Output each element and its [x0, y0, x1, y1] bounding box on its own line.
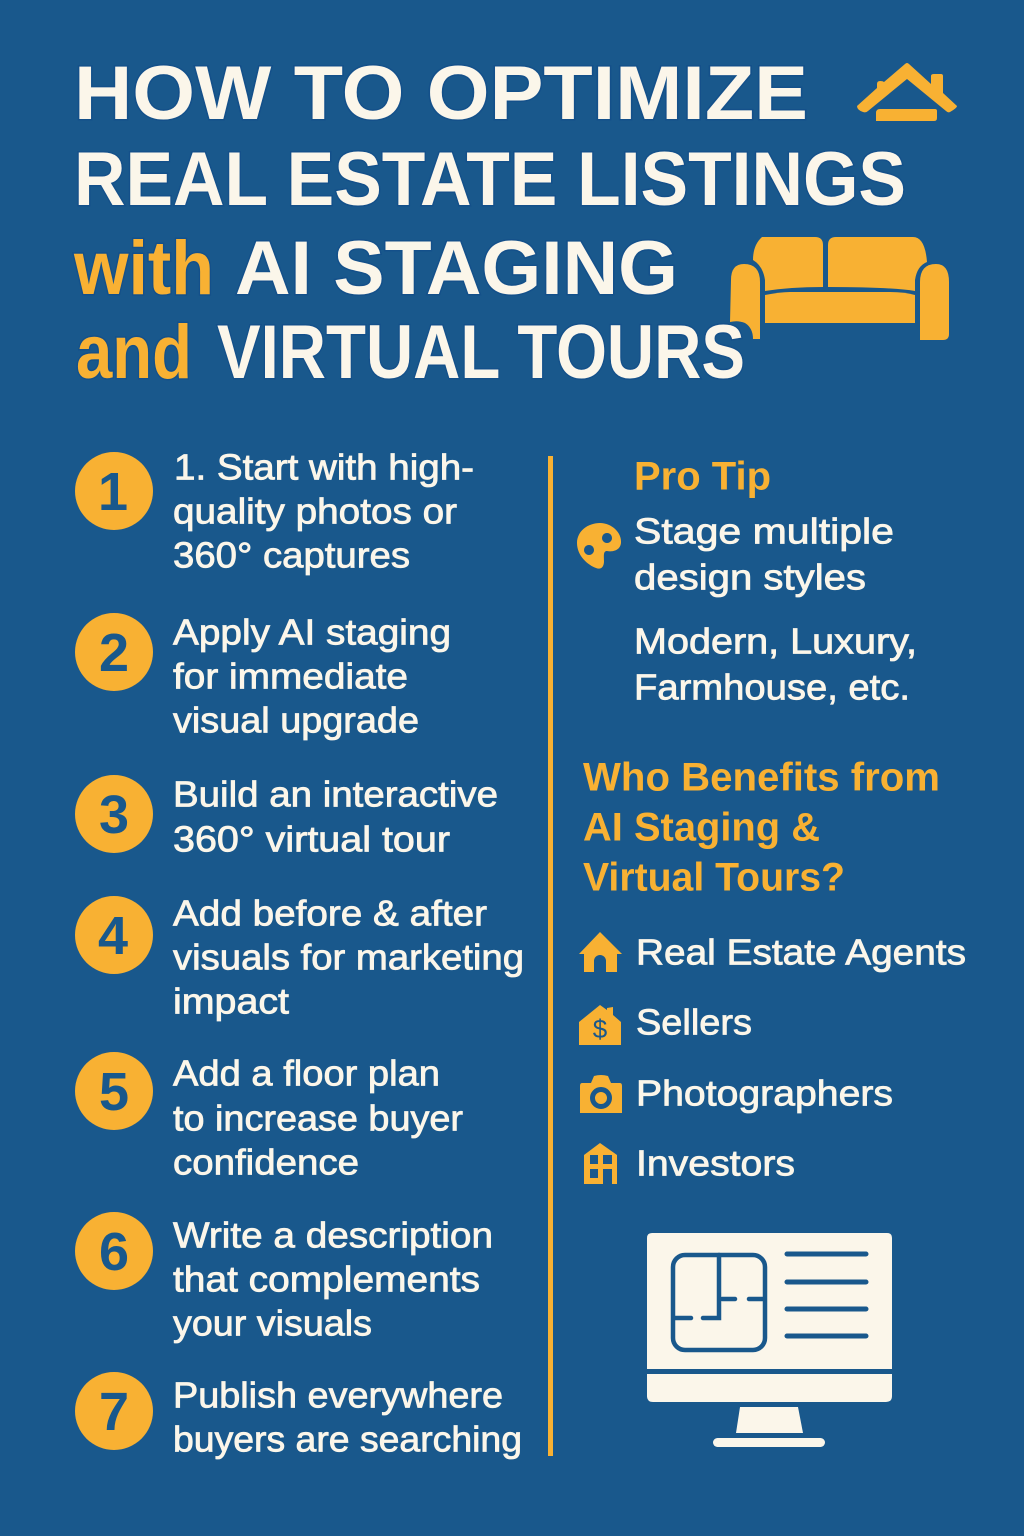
benefit: real estate agents: Real Estate Agents — [636, 931, 966, 972]
pro tip text — [634, 510, 917, 707]
step 4: impact — [173, 980, 289, 1021]
heading: who benefits: Virtual Tours? — [583, 855, 845, 899]
step 2: for immediate — [173, 655, 408, 696]
step 1: quality photos or — [173, 490, 457, 531]
icon: palette — [577, 523, 621, 569]
heading: who benefits: AI Staging & — [583, 805, 820, 849]
benefit: investors — [584, 1142, 795, 1184]
step 4: 4 — [98, 906, 128, 966]
step 4: Add before & after — [173, 892, 487, 933]
step 4: visuals for marketing — [173, 936, 524, 977]
floor plan — [673, 1255, 765, 1350]
step 6: 6 — [99, 1222, 129, 1282]
step 5: to increase buyer — [173, 1097, 463, 1138]
heading: who benefits — [583, 755, 940, 899]
step 3: 360° virtual tour — [173, 818, 450, 859]
heading: who benefits: Who Benefits from — [583, 755, 940, 799]
pro tip text: Stage multiple — [634, 510, 894, 551]
icon: monitor with floor plan — [647, 1233, 892, 1447]
heading: pro tip: Pro Tip — [634, 454, 771, 498]
step 6: Write a description — [173, 1214, 493, 1255]
step 3: 3 — [99, 785, 129, 845]
step 2: Apply AI staging — [173, 611, 451, 652]
step 6 — [75, 1212, 493, 1343]
step 5: confidence — [173, 1141, 359, 1182]
title: with — [73, 226, 214, 311]
pro tip text: Modern, Luxury, — [634, 620, 917, 661]
step 7 — [75, 1372, 522, 1459]
title — [73, 51, 906, 395]
pro tip text: Farmhouse, etc. — [634, 666, 910, 707]
title: AI STAGING — [235, 226, 678, 311]
listing text lines — [787, 1254, 866, 1336]
icon: house roof — [857, 63, 957, 121]
step 7: buyers are searching — [173, 1418, 522, 1459]
step 3: Build an interactive — [173, 773, 498, 814]
step 6: your visuals — [173, 1302, 372, 1343]
step 4 — [75, 892, 524, 1021]
panel: pro tip — [577, 454, 917, 707]
icon: sofa — [730, 237, 949, 340]
benefit: sellers — [579, 1001, 752, 1045]
panel: seven steps — [75, 446, 524, 1459]
step 1: 360° captures — [173, 534, 410, 575]
pro tip text: design styles — [634, 556, 866, 597]
benefit: photographers: Photographers — [636, 1072, 893, 1113]
benefit: investors: Investors — [636, 1142, 795, 1183]
step 5: Add a floor plan — [173, 1052, 440, 1093]
step 2 — [75, 611, 451, 740]
title: REAL ESTATE LISTINGS — [74, 137, 906, 222]
benefit: sellers: $ — [593, 1014, 608, 1044]
step 3 — [75, 773, 498, 859]
step 2: 2 — [99, 623, 129, 683]
step 5 — [75, 1052, 463, 1182]
step 1: 1 — [98, 462, 128, 522]
step 7: Publish everywhere — [173, 1374, 503, 1415]
step 1: 1. Start with high- — [174, 446, 474, 487]
step 7: 7 — [99, 1382, 129, 1442]
step 6: that complements — [173, 1258, 480, 1299]
step 5: 5 — [99, 1062, 129, 1122]
benefit: sellers: Sellers — [636, 1001, 752, 1042]
title: VIRTUAL TOURS — [217, 310, 745, 395]
step 2: visual upgrade — [173, 699, 419, 740]
step 1 — [75, 446, 474, 575]
title: HOW TO OPTIMIZE — [74, 51, 808, 136]
title: and — [76, 310, 192, 395]
